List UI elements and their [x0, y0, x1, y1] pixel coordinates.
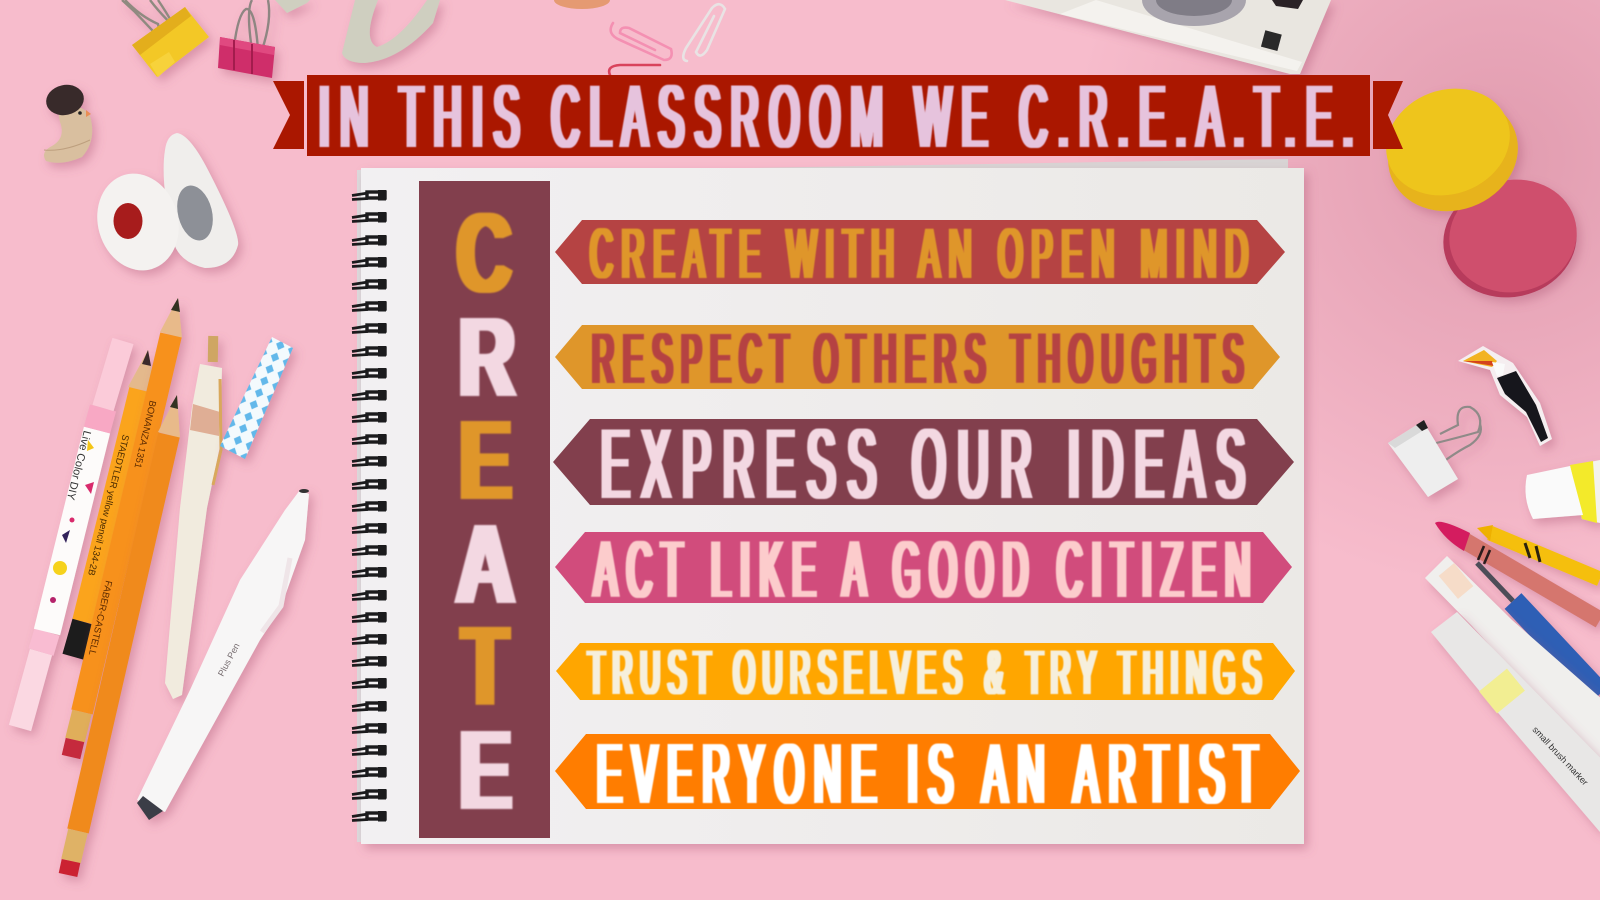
banner: respect others thoughts: [555, 320, 1280, 399]
icon: yellow crayon: [1477, 525, 1600, 579]
letter E: E: [460, 707, 512, 833]
title ribbon: [273, 66, 1403, 166]
icon: cream ballpoint pen: [165, 336, 222, 699]
icon: yellow staedtler pencil: [74, 350, 155, 657]
icon: paint tube: [1525, 460, 1600, 523]
icon: scissors handle: [275, 0, 440, 63]
object: gold-toned top edge trinket: [554, 0, 610, 9]
panel: spiral notebook: [357, 159, 1304, 844]
icon: paper clips: [609, 4, 725, 75]
icon: magenta binder clip: [218, 0, 275, 78]
icon: toucan sticker: [1458, 346, 1552, 446]
icon: camera: [1005, 0, 1331, 74]
icon: orange long pencil: [68, 395, 180, 875]
ribbon tail right: [1373, 81, 1403, 149]
banner: act like a good citizen: [555, 525, 1292, 615]
icon: blue paint brush: [1477, 563, 1600, 694]
icon: yellow binder clip: [122, 0, 209, 77]
icon: blue patterned cap: [220, 337, 293, 459]
letter C: C: [457, 190, 511, 316]
icon: orange bonanza pencil: FABER-CASTELL: [86, 579, 114, 656]
ribbon tail left: [273, 81, 304, 149]
icon: orange bonanza pencil: BONANZA 1351: [132, 399, 158, 469]
banner: everyone is an artist: [555, 727, 1300, 822]
icon: white marker with peach cap: [1425, 556, 1600, 766]
icon: white marker with yellow band: [1431, 612, 1600, 832]
letter E: E: [460, 397, 512, 523]
icon: live color marker: Live Color DIY: [64, 429, 93, 502]
icon: white sign pen: [137, 489, 309, 820]
icon: white binder clip: [1388, 407, 1481, 497]
letter R: R: [459, 294, 515, 420]
icon: white erasers: [86, 133, 238, 280]
spiral binding: [352, 190, 386, 822]
panel: vertical CREATE column: [419, 181, 550, 838]
icon: live color marker: [20, 341, 123, 728]
banner: trust ourselves and try things: [556, 638, 1295, 708]
banner: create with an open mind: [555, 215, 1285, 294]
letter A: A: [456, 501, 514, 627]
icon: pink crayon: [1435, 522, 1600, 620]
icon: white marker with yellow band: small brush marker: [1531, 725, 1590, 787]
banner: express our ideas: [553, 408, 1294, 519]
icon: bird figurine: [43, 81, 92, 163]
icon: macarons: [1371, 72, 1588, 310]
icon: white sign pen: Plus Pen: [216, 641, 242, 678]
letter T: T: [462, 603, 508, 729]
icon: yellow staedtler pencil: STAEDTLER yellow pencil 134-2B: [85, 433, 131, 577]
icon: orange bonanza pencil: [71, 298, 182, 757]
